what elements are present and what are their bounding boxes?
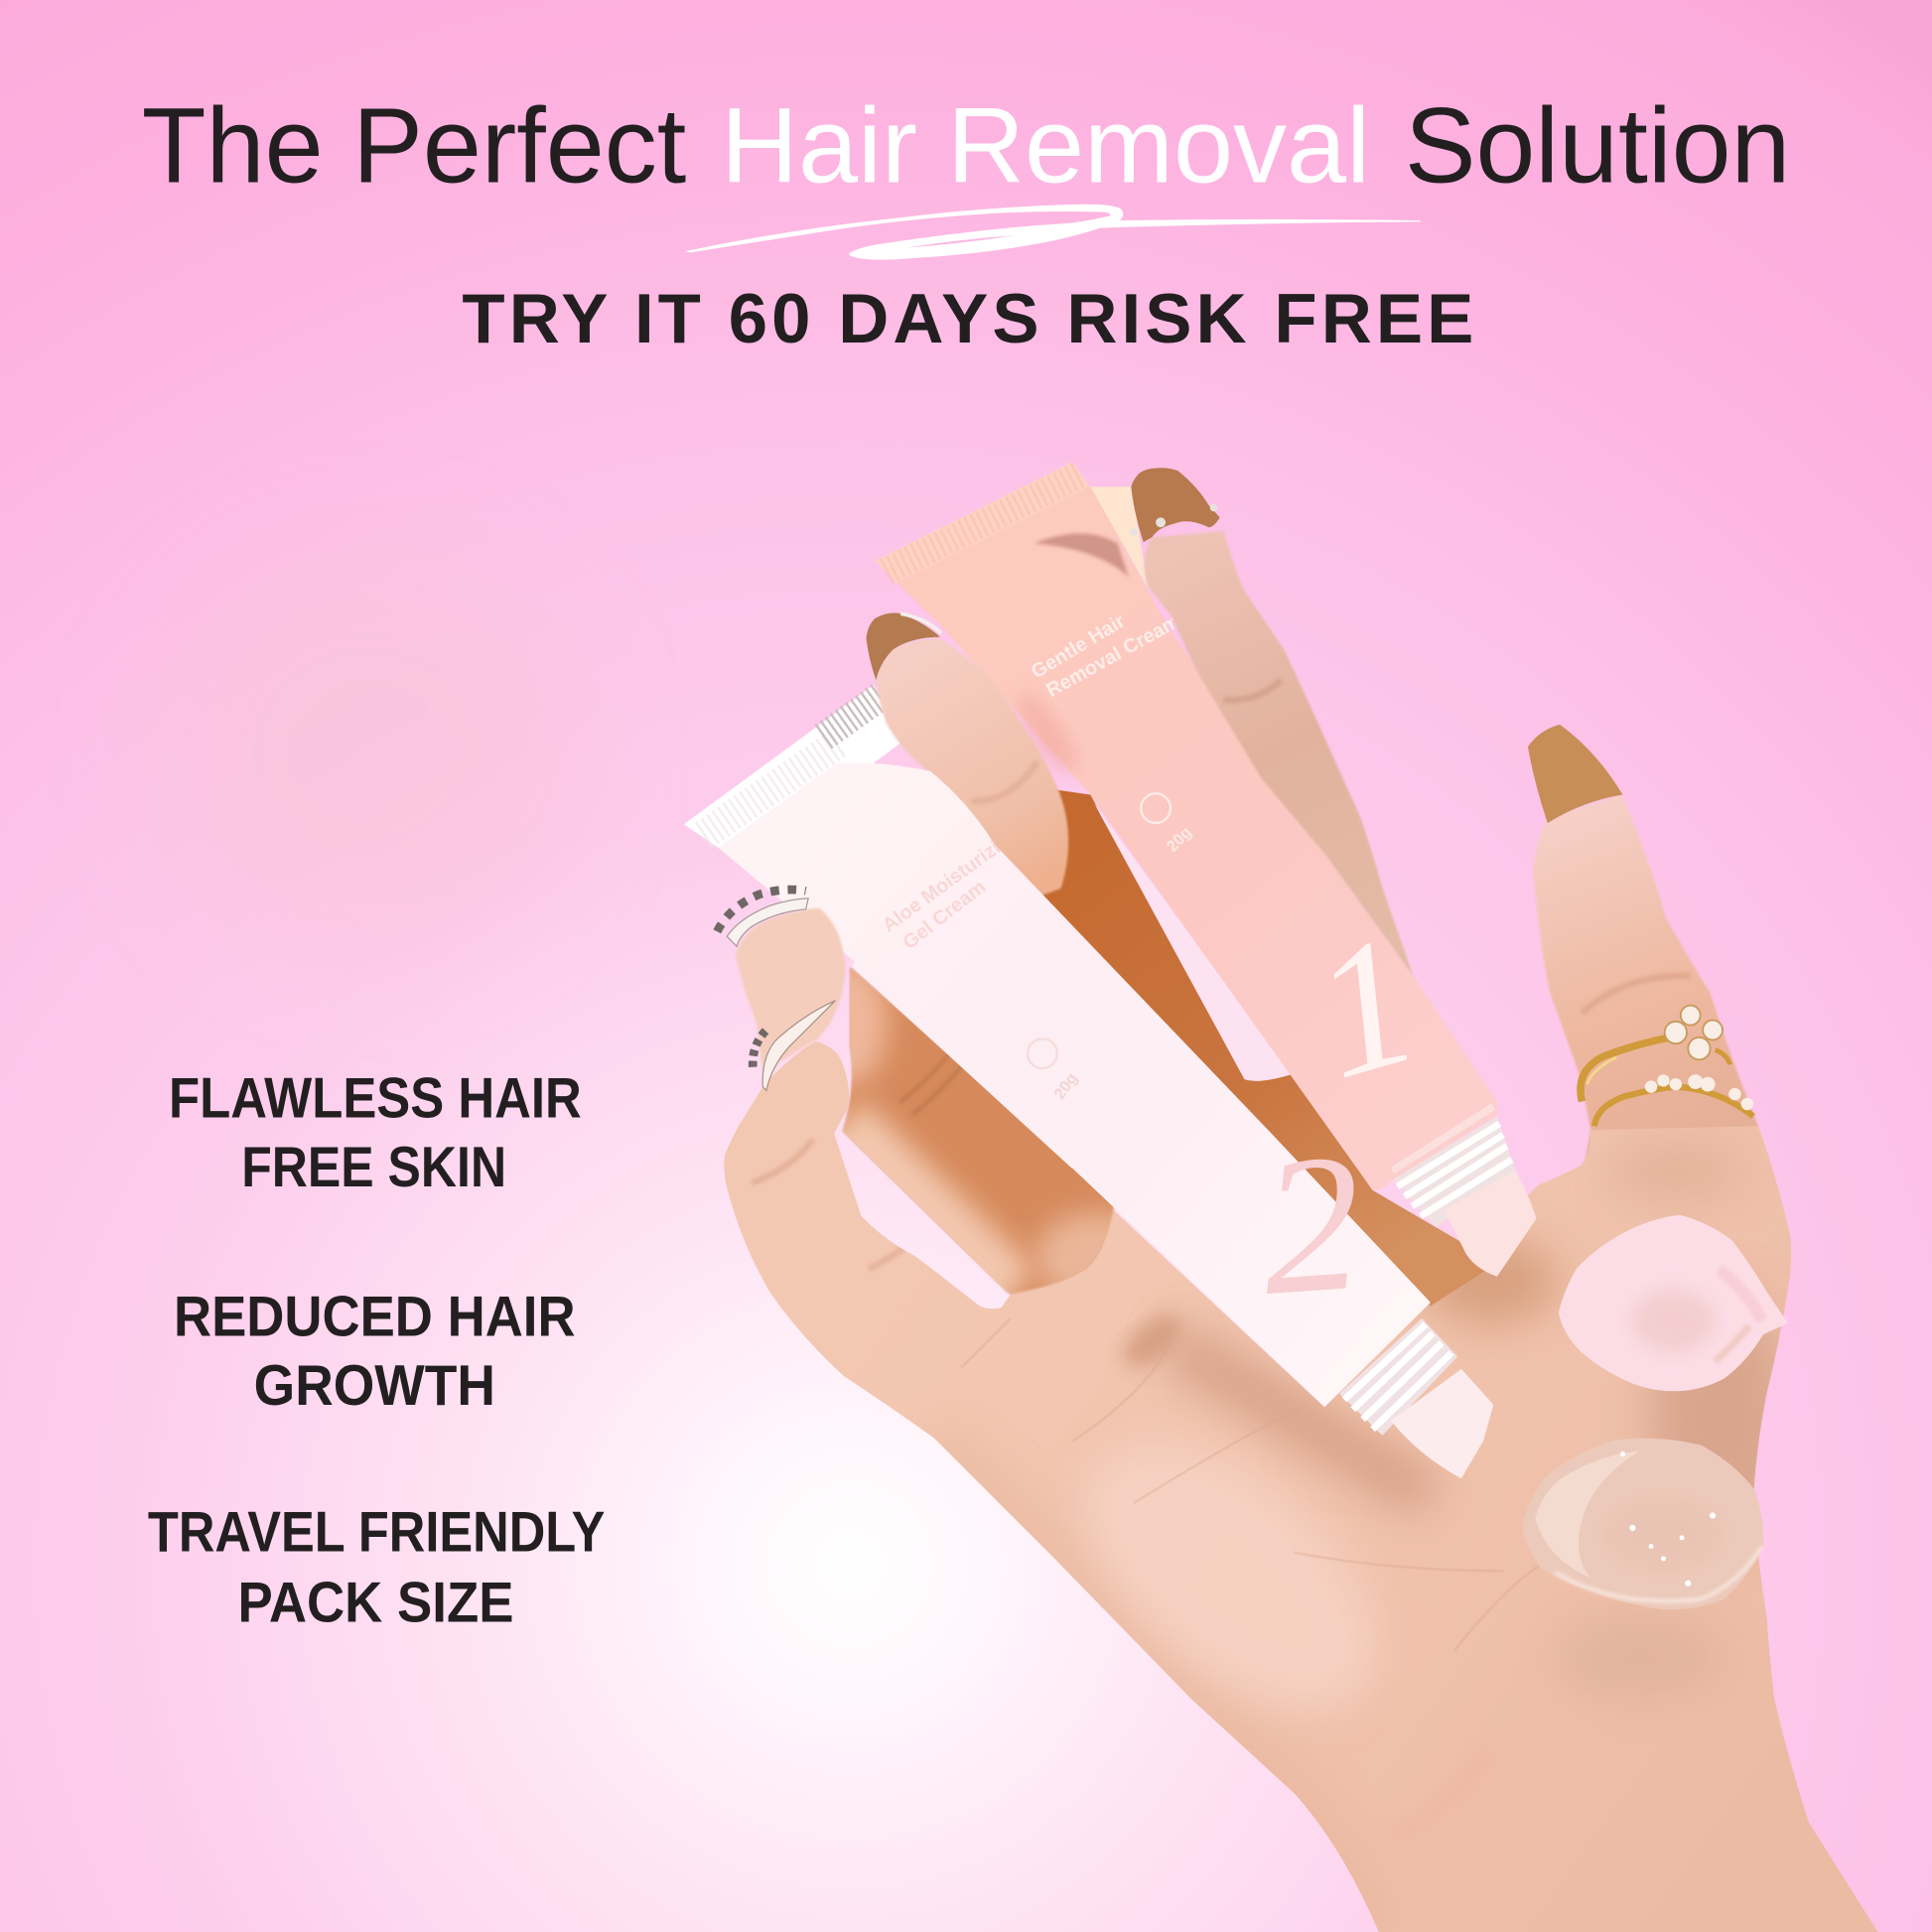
tube 2: crimped end (684, 685, 905, 848)
title (142, 85, 1790, 206)
subtitle: TRY IT 60 DAYS RISK FREE (462, 279, 1473, 357)
tube 2: product name: Gel Cream (898, 876, 990, 954)
tube 2: cap (1391, 1369, 1493, 1478)
tube 1: product name: Gentle Hair (1028, 611, 1129, 683)
hand: right finger with nail (1528, 725, 1758, 1232)
benefit: flawless hair free skin: FLAWLESS HAIR (169, 1067, 582, 1131)
hand: index finger over tube (1130, 468, 1414, 976)
tube 1: cap (1445, 1171, 1537, 1277)
benefit: reduced hair growth (174, 1285, 576, 1418)
tube 2: number 2: 2 (1254, 1112, 1368, 1336)
tube 2: neck threads (1339, 1318, 1457, 1436)
benefit: travel friendly pack size: PACK SIZE (238, 1571, 514, 1634)
cream swatch: clear aloe gel (1522, 1439, 1763, 1609)
title: The Perfect (142, 85, 686, 206)
tube 2: product name (885, 840, 1001, 947)
white swoosh underline (685, 205, 1421, 260)
hand: shaded ring finger below tube (842, 967, 1115, 1295)
benefit: reduced hair growth: GROWTH (254, 1354, 495, 1418)
title: Hair Removal (721, 85, 1370, 206)
tube 1: weight: 20g (1164, 823, 1195, 856)
ring: silver upper ring (717, 890, 808, 946)
tube 2: logo (1028, 1038, 1057, 1068)
benefit: reduced hair growth: REDUCED HAIR (174, 1285, 576, 1348)
benefit: flawless hair free skin (169, 1067, 582, 1199)
title: Solution (1405, 85, 1790, 206)
tube 2: product name: Aloe Moisturizing (879, 823, 1025, 937)
benefit: travel friendly pack size (148, 1501, 605, 1634)
hand: palm and wrist (724, 1041, 1877, 1932)
tube 2: aloe moisturising gel (719, 762, 1493, 1478)
tube 1: product name: Removal Cream (1042, 611, 1183, 702)
tube 1: hair removal cream (875, 462, 1537, 1277)
hand: middle finger (866, 613, 1068, 897)
blurred blush blob (160, 554, 579, 949)
tube 2: weight: 20g (1050, 1069, 1081, 1103)
hand: shaded finger between tubes (986, 788, 1497, 1307)
hand: ring fingertip (736, 908, 845, 1072)
ring: silver lower ring (753, 1001, 835, 1090)
cream swatch: pink removal cream (1559, 1215, 1788, 1391)
ring: gold pearl rings (1581, 1006, 1753, 1126)
tube 1: number 1: 1 (1293, 897, 1439, 1119)
tube 1: logo (1141, 793, 1171, 823)
gap showing background beside tube (1094, 803, 1292, 1081)
hand holding tubes (684, 462, 1877, 1932)
benefit: flawless hair free skin: FREE SKIN (241, 1136, 506, 1199)
benefit: travel friendly pack size: TRAVEL FRIENDLY (148, 1501, 605, 1565)
tube 1: neck threads (1394, 1116, 1516, 1227)
